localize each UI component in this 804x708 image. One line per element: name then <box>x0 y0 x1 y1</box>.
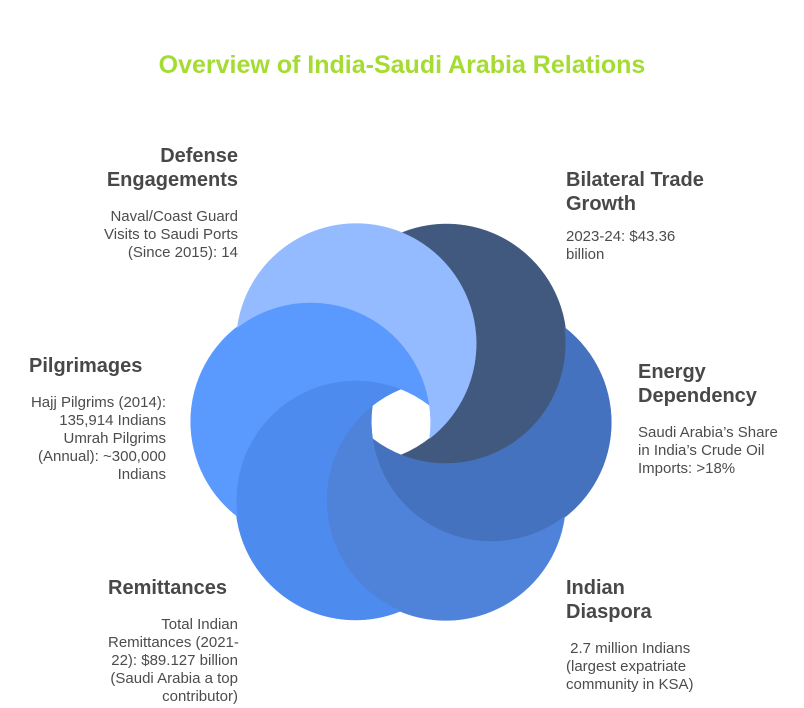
text block: energy dependency: Energy Dependency <box>638 361 757 407</box>
text block: bilateral trade growth: 2023-24: $43.36 billion <box>566 228 675 263</box>
text block: indian diaspora <box>566 577 694 693</box>
text block: remittances <box>108 577 239 705</box>
text block: energy dependency <box>638 361 778 477</box>
text block: pilgrimages: Pilgrimages <box>29 355 142 377</box>
segment: bilateral trade growth <box>401 224 567 464</box>
text block: remittances: Total Indian Remittances (2021- 22): $89.127 billion (Saudi Arabia a top contributor) <box>108 616 239 705</box>
segment: energy dependency <box>372 328 611 542</box>
text block: pilgrimages <box>29 355 166 483</box>
text block: indian diaspora: 2.7 million Indians (largest expatriate community in KSA) <box>566 640 694 693</box>
text block: energy dependency: Saudi Arabia’s Share in India’s Crude Oil Imports: >18% <box>638 424 778 477</box>
text block: defense engagements: Naval/Coast Guard Visits to Saudi Ports (Since 2015): 14 <box>104 208 238 261</box>
text block: remittances: Remittances <box>108 577 227 599</box>
text block: bilateral trade growth <box>566 169 704 263</box>
segment: pilgrimages <box>191 302 430 516</box>
segment: defense engagements <box>237 224 476 438</box>
text block: pilgrimages: Hajj Pilgrims (2014): 135,914 Indians Umrah Pilgrims (Annual): ~300,000 Indians <box>31 394 166 483</box>
text block: defense engagements <box>104 145 238 261</box>
title: Overview of India-Saudi Arabia Relations <box>159 51 645 79</box>
segment: indian diaspora <box>326 406 565 620</box>
text block: bilateral trade growth: Bilateral Trade Growth <box>566 169 704 215</box>
segment: remittances <box>235 380 401 620</box>
text block: defense engagements: Defense Engagements <box>107 145 238 191</box>
text block: indian diaspora: Indian Diaspora <box>566 577 652 623</box>
